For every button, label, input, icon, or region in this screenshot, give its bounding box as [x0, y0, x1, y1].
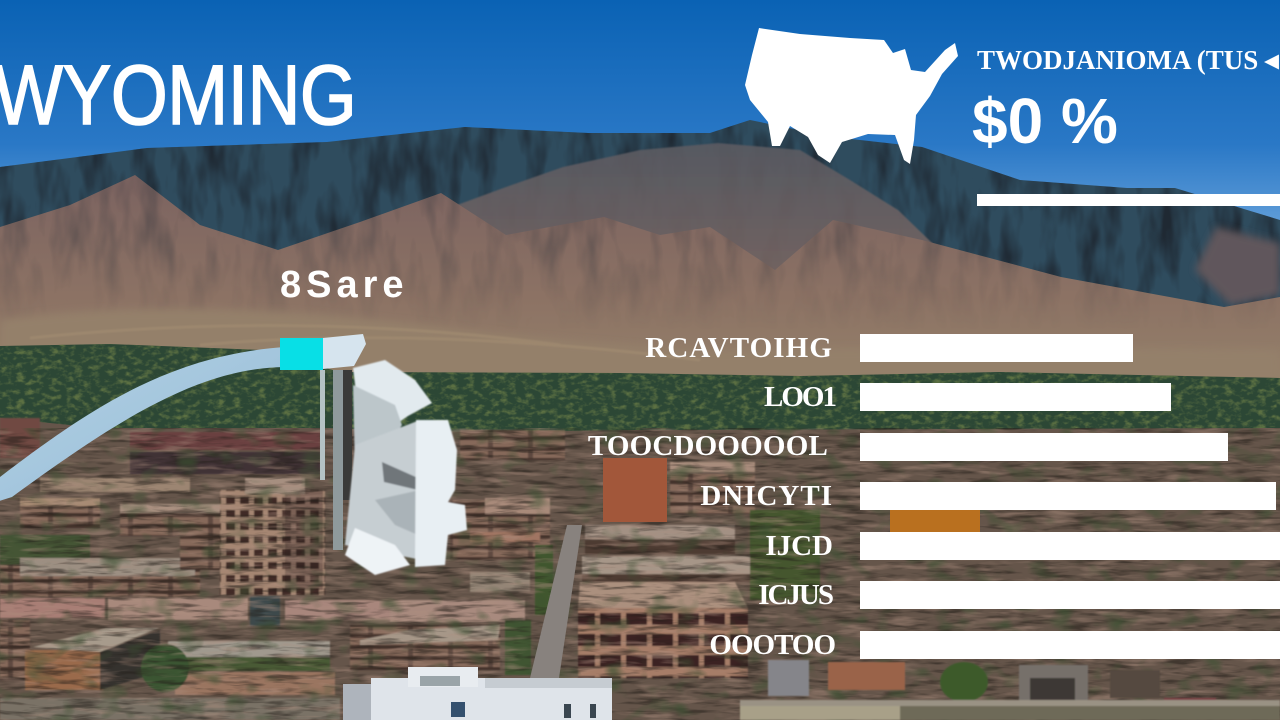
bar row 3	[860, 433, 1228, 461]
pipe	[0, 347, 285, 502]
town base	[0, 418, 1280, 720]
bar row 5	[860, 532, 1280, 560]
bar row 4 label: DNICYTI	[700, 480, 833, 512]
orange accent	[890, 510, 980, 532]
bar row 4	[860, 482, 1276, 510]
bar row 2	[860, 383, 1171, 411]
bar row 7	[860, 631, 1280, 659]
brown square accent	[603, 458, 667, 522]
icon: US map silhouette	[745, 28, 958, 164]
bar row 1 label: RCAVTOIHG	[645, 332, 833, 364]
bar row 5 label: IJCD	[765, 530, 833, 562]
bar row 1	[860, 334, 1133, 362]
bottom white building	[343, 667, 612, 720]
bar row 3 label: TOOCDOOOOOL	[588, 430, 828, 462]
bar row 7 label: OOOTOO	[709, 629, 835, 661]
cyan coupling	[280, 338, 323, 370]
gauge label: 8Sare	[280, 264, 409, 306]
stat value: $0 %	[972, 85, 1118, 157]
bar row 6 label: ICJUS	[758, 579, 832, 611]
bar row 2 label: LOO1	[764, 381, 835, 413]
diagram: curved pipe and white structure	[0, 334, 468, 576]
stat caption: TWODJANIOMA (TUS ◂	[977, 45, 1279, 75]
white abstract structure	[345, 360, 467, 575]
bar row 6	[860, 581, 1280, 609]
forest	[0, 344, 1280, 440]
stat divider bar	[977, 194, 1280, 206]
support posts	[320, 370, 352, 550]
pipe end cap	[323, 334, 366, 369]
road	[530, 525, 582, 678]
title: WYOMING	[0, 48, 356, 142]
